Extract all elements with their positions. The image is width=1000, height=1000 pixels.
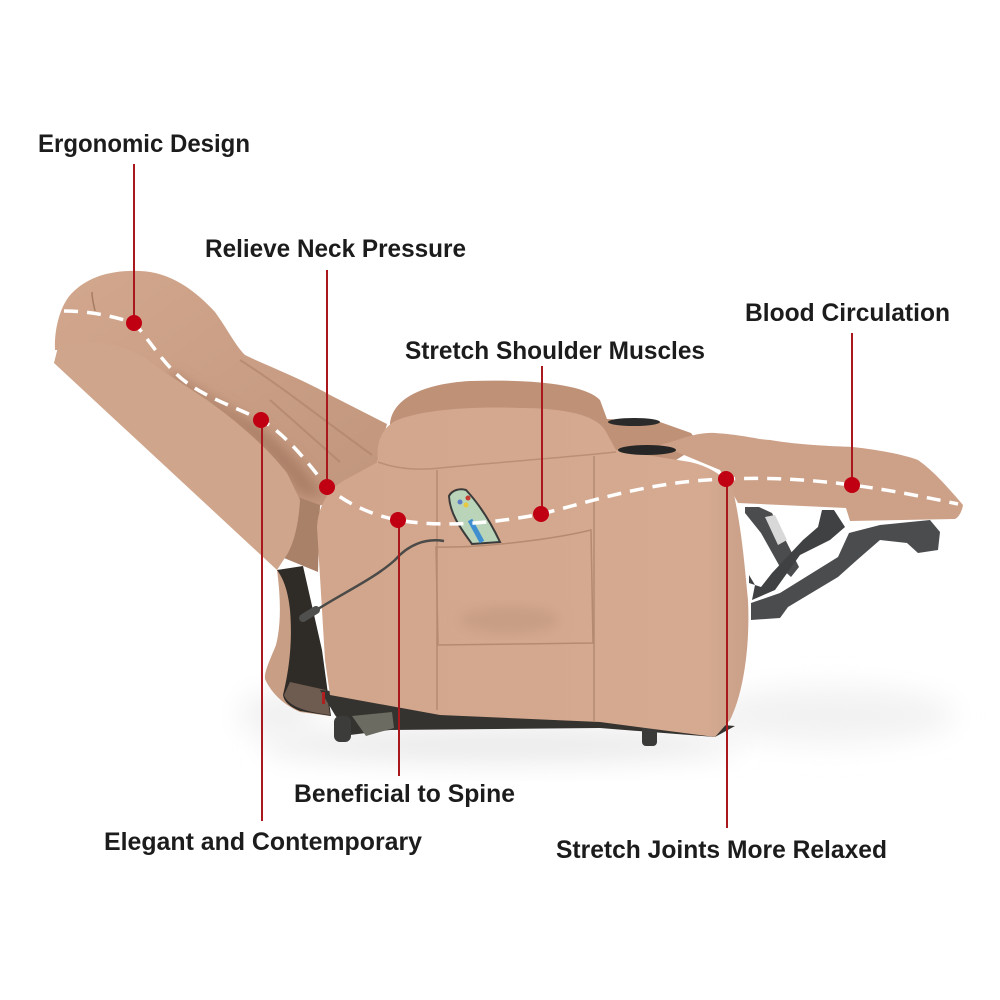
massage remote <box>449 489 500 544</box>
cushion dark fold <box>170 372 325 498</box>
callout: Elegant and Contemporary: Elegant and Contemporary <box>104 828 422 856</box>
backrest tufting folds <box>240 360 372 462</box>
callout: Ergonomic Design <box>38 130 250 331</box>
backrest lower side panel <box>54 343 300 570</box>
white bracket <box>765 515 787 545</box>
backrest lower wedge <box>284 495 320 572</box>
callout: Ergonomic Design: Ergonomic Design <box>38 130 250 158</box>
callout: Stretch Shoulder Muscles <box>405 337 705 522</box>
main chair body <box>317 408 748 737</box>
pocket shading <box>460 606 560 634</box>
dashed body curve <box>64 311 958 524</box>
footrest steel linkage <box>745 507 940 620</box>
callout: Elegant and Contemporary <box>104 412 422 856</box>
callout: Stretch Joints More Relaxed: Stretch Joints More Relaxed <box>556 836 887 864</box>
base mechanism and casters <box>320 690 735 746</box>
upper link <box>745 507 799 577</box>
pocket and panel seams <box>436 456 594 722</box>
callout: Blood Circulation: Blood Circulation <box>745 299 950 327</box>
power cable and plug <box>303 540 444 618</box>
callout: Beneficial to Spine: Beneficial to Spine <box>294 780 515 808</box>
back brace <box>749 510 845 600</box>
far armrest <box>390 381 700 470</box>
armrest pad seam <box>378 452 616 469</box>
callout: Blood Circulation <box>745 299 950 493</box>
front cup holder <box>618 445 676 455</box>
headrest crease <box>92 292 95 311</box>
floor shadow <box>240 687 955 761</box>
main rail <box>751 520 940 620</box>
callout: Relieve Neck Pressure: Relieve Neck Pressure <box>205 235 466 263</box>
callout: Relieve Neck Pressure <box>205 235 466 495</box>
footrest cushion <box>660 433 963 521</box>
backrest upper cushion <box>55 271 387 510</box>
callout: Stretch Joints More Relaxed <box>556 471 887 864</box>
reclining chair illustration <box>54 271 963 746</box>
rear support panel <box>265 566 331 716</box>
callout: Beneficial to Spine <box>294 512 515 808</box>
callout: Stretch Shoulder Muscles: Stretch Shoulder Muscles <box>405 337 705 365</box>
